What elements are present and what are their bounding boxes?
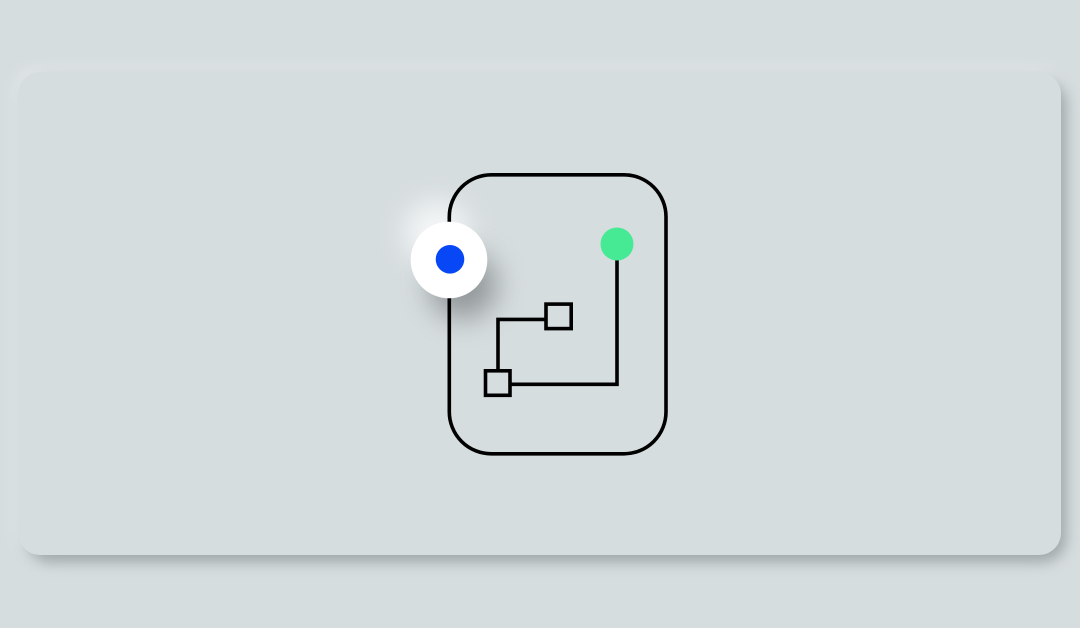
icon: square node lower: [486, 371, 510, 395]
icon: square node upper: [546, 304, 571, 329]
device outline: [449, 175, 666, 454]
button glow and shadow: [405, 201, 497, 319]
icon: green status dot: [600, 228, 634, 260]
circuit connector lines: [498, 250, 617, 384]
toggle button with blue dot: [411, 222, 487, 298]
panel: raised card: [14, 67, 1066, 562]
